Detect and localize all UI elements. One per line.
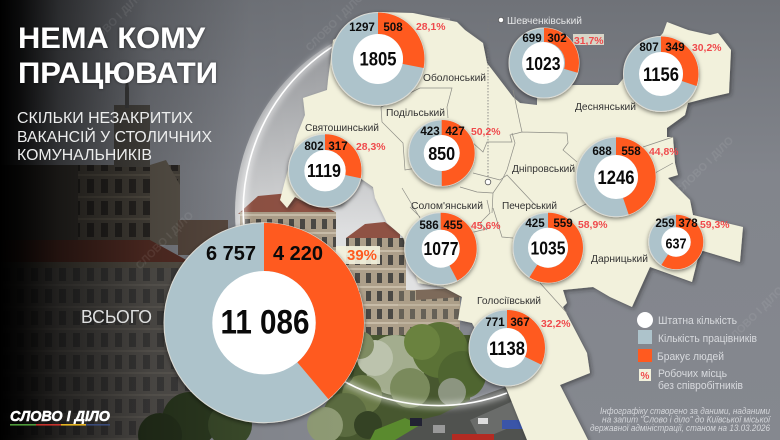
donut: Дніпровський: 1246: [598, 168, 634, 189]
donut: Дарницький: [649, 215, 729, 269]
donut: Голосіївський: 1138: [489, 339, 525, 360]
percent badge 39%: [336, 246, 380, 264]
donut: Шевченківський: 31,7%: [574, 36, 603, 47]
donut: Дарницький: 637: [666, 236, 686, 252]
watermarks: СЛОВО І ДІЛО: [134, 209, 197, 272]
donut: Шевченківський: 302: [547, 32, 567, 45]
legend: percent: Робочих місць: [658, 368, 727, 380]
district labels: Печерський: [502, 201, 557, 212]
source note: на запит "Слово і діло" до Київської міської: [602, 414, 771, 424]
donut: total: 6 757: [206, 242, 256, 265]
district labels: Дніпровський: [512, 164, 575, 175]
donut: Шевченківський: 699: [522, 32, 542, 45]
photo: city street backdrop: [16, 17, 527, 440]
donut: Шевченківський: [509, 28, 604, 98]
donut: Дніпровський: 688: [592, 145, 612, 158]
title: ПРАЦЮВАТИ: [18, 57, 218, 90]
map of Kyiv districts: [280, 12, 743, 440]
donut: total: 11 086: [220, 304, 310, 342]
donut: Деснянський: 1156: [643, 65, 679, 86]
donut: Печерський: 1035: [530, 238, 566, 258]
legend: headcount: Штатна кількість: [658, 315, 737, 327]
donut: Подільський: 50,2%: [471, 127, 500, 138]
donut: Подільський: 427: [445, 125, 465, 138]
district labels: Деснянський: [575, 102, 636, 113]
donut: Деснянський: 807: [639, 41, 659, 54]
donut: Дніпровський: 558: [621, 145, 641, 158]
donut: Голосіївський: 367: [510, 316, 530, 329]
legend: workers: Кількість працівників: [658, 333, 757, 345]
title: НЕМА КОМУ: [18, 22, 205, 55]
percent badge 39%: 39%: [347, 247, 377, 264]
donut: Солом'янський: 45,6%: [471, 221, 500, 232]
donut: Святошинський: 802: [304, 140, 324, 153]
donut: Солом'янський: [405, 213, 500, 285]
donut: Печерський: 559: [553, 217, 573, 230]
donut: Деснянський: 30,2%: [692, 43, 721, 54]
donut: Оболонський: 28,1%: [416, 22, 445, 33]
donut: Печерський: [513, 213, 607, 283]
legend: percent: %: [641, 371, 650, 382]
donut: Оболонський: 508: [383, 21, 403, 34]
donut: Святошинський: 28,3%: [356, 142, 385, 153]
donut: Деснянський: [624, 36, 721, 112]
donut: Дарницький: 378: [678, 217, 698, 230]
donut: Дарницький: 259: [655, 217, 675, 230]
glowing ring: [243, 47, 507, 406]
donut: Солом'янський: 586: [419, 219, 439, 232]
donut: Святошинський: [288, 134, 385, 207]
district labels: Святошинський: [305, 123, 379, 134]
district labels: Подільський: [386, 108, 445, 119]
subtitle: СКІЛЬКИ НЕЗАКРИТИХ: [17, 110, 194, 127]
donut: Голосіївський: 771: [485, 316, 505, 329]
watermarks: [84, 0, 780, 347]
district labels: Шевченківський: [507, 16, 582, 27]
donut: Дніпровський: 44,8%: [649, 147, 678, 158]
donut: Голосіївський: 32,2%: [541, 319, 570, 330]
logo: Слово і діло: СЛОВО І ДІЛО: [10, 408, 110, 425]
donut: total: [164, 223, 380, 423]
district labels: Голосіївський: [477, 296, 541, 307]
donut: Святошинський: 1119: [307, 160, 341, 181]
donut: Святошинський: 317: [328, 140, 348, 153]
donut: Солом'янський: 1077: [424, 239, 458, 259]
donut: Шевченківський: 1023: [526, 54, 560, 74]
subtitle: КОМУНАЛЬНИКІВ: [17, 147, 152, 164]
donut: Печерський: 425: [525, 217, 545, 230]
donut: Деснянський: 349: [665, 41, 685, 54]
donut: Подільський: 850: [428, 143, 455, 164]
donut: Подільський: 423: [420, 125, 440, 138]
legend: percent: [639, 368, 743, 392]
district labels: Оболонський: [423, 72, 486, 84]
donut: Подільський: [409, 120, 500, 186]
district labels: Солом'янський: [411, 201, 483, 212]
watermarks: СЛОВО І ДІЛО: [674, 134, 737, 197]
donut: Печерський: 58,9%: [578, 220, 607, 231]
district labels: [305, 16, 648, 307]
donut: Голосіївський: [469, 310, 570, 386]
donut: Дніпровський: [576, 137, 678, 217]
donut: Оболонський: [332, 12, 445, 106]
dark fade over left of photo: [0, 0, 345, 440]
legend: [637, 312, 757, 392]
donut: Оболонський: 1805: [360, 50, 397, 70]
donut: Дарницький: 59,3%: [700, 220, 729, 231]
legend: shortage: Бракує людей: [657, 351, 724, 363]
donut: Солом'янський: 455: [443, 219, 463, 232]
district labels: Дарницький: [591, 254, 648, 265]
legend: percent: без співробітників: [658, 380, 743, 392]
total label: ВСЬОГО: [81, 306, 152, 327]
subtitle: ВАКАНСІЙ У СТОЛИЧНИХ: [17, 127, 213, 146]
donut: total: 4 220: [273, 242, 323, 265]
donut: Оболонський: 1297: [349, 21, 375, 34]
Shevchenkivskyi leader line: [485, 17, 504, 185]
